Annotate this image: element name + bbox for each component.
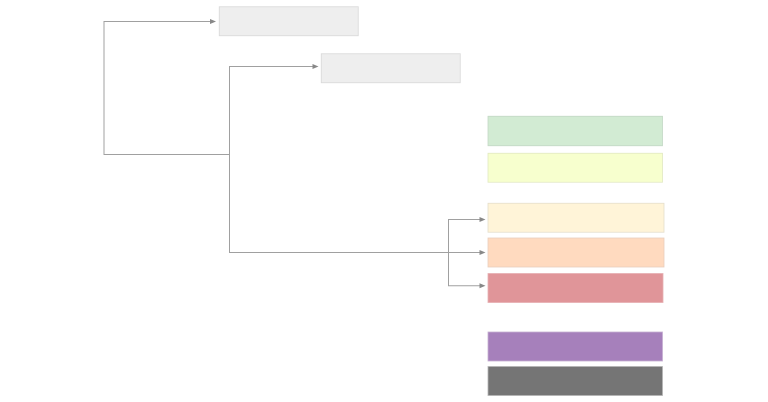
box: dark grey: [488, 366, 662, 396]
box: second grey: [321, 54, 460, 83]
box: cream: [488, 203, 664, 232]
box: peach: [488, 238, 664, 267]
box: green: [488, 116, 662, 146]
arrow: branch to cream box: [448, 217, 486, 252]
arrow: trunk to second grey box: [230, 64, 318, 252]
arrow: trunk to peach box: [229, 250, 486, 255]
arrow: trunk to top grey box: [104, 19, 229, 154]
box: top grey: [219, 7, 358, 36]
arrow: branch to red box: [448, 252, 486, 288]
box: purple: [488, 332, 662, 361]
box: red: [488, 274, 663, 302]
box: yellow: [488, 153, 662, 182]
